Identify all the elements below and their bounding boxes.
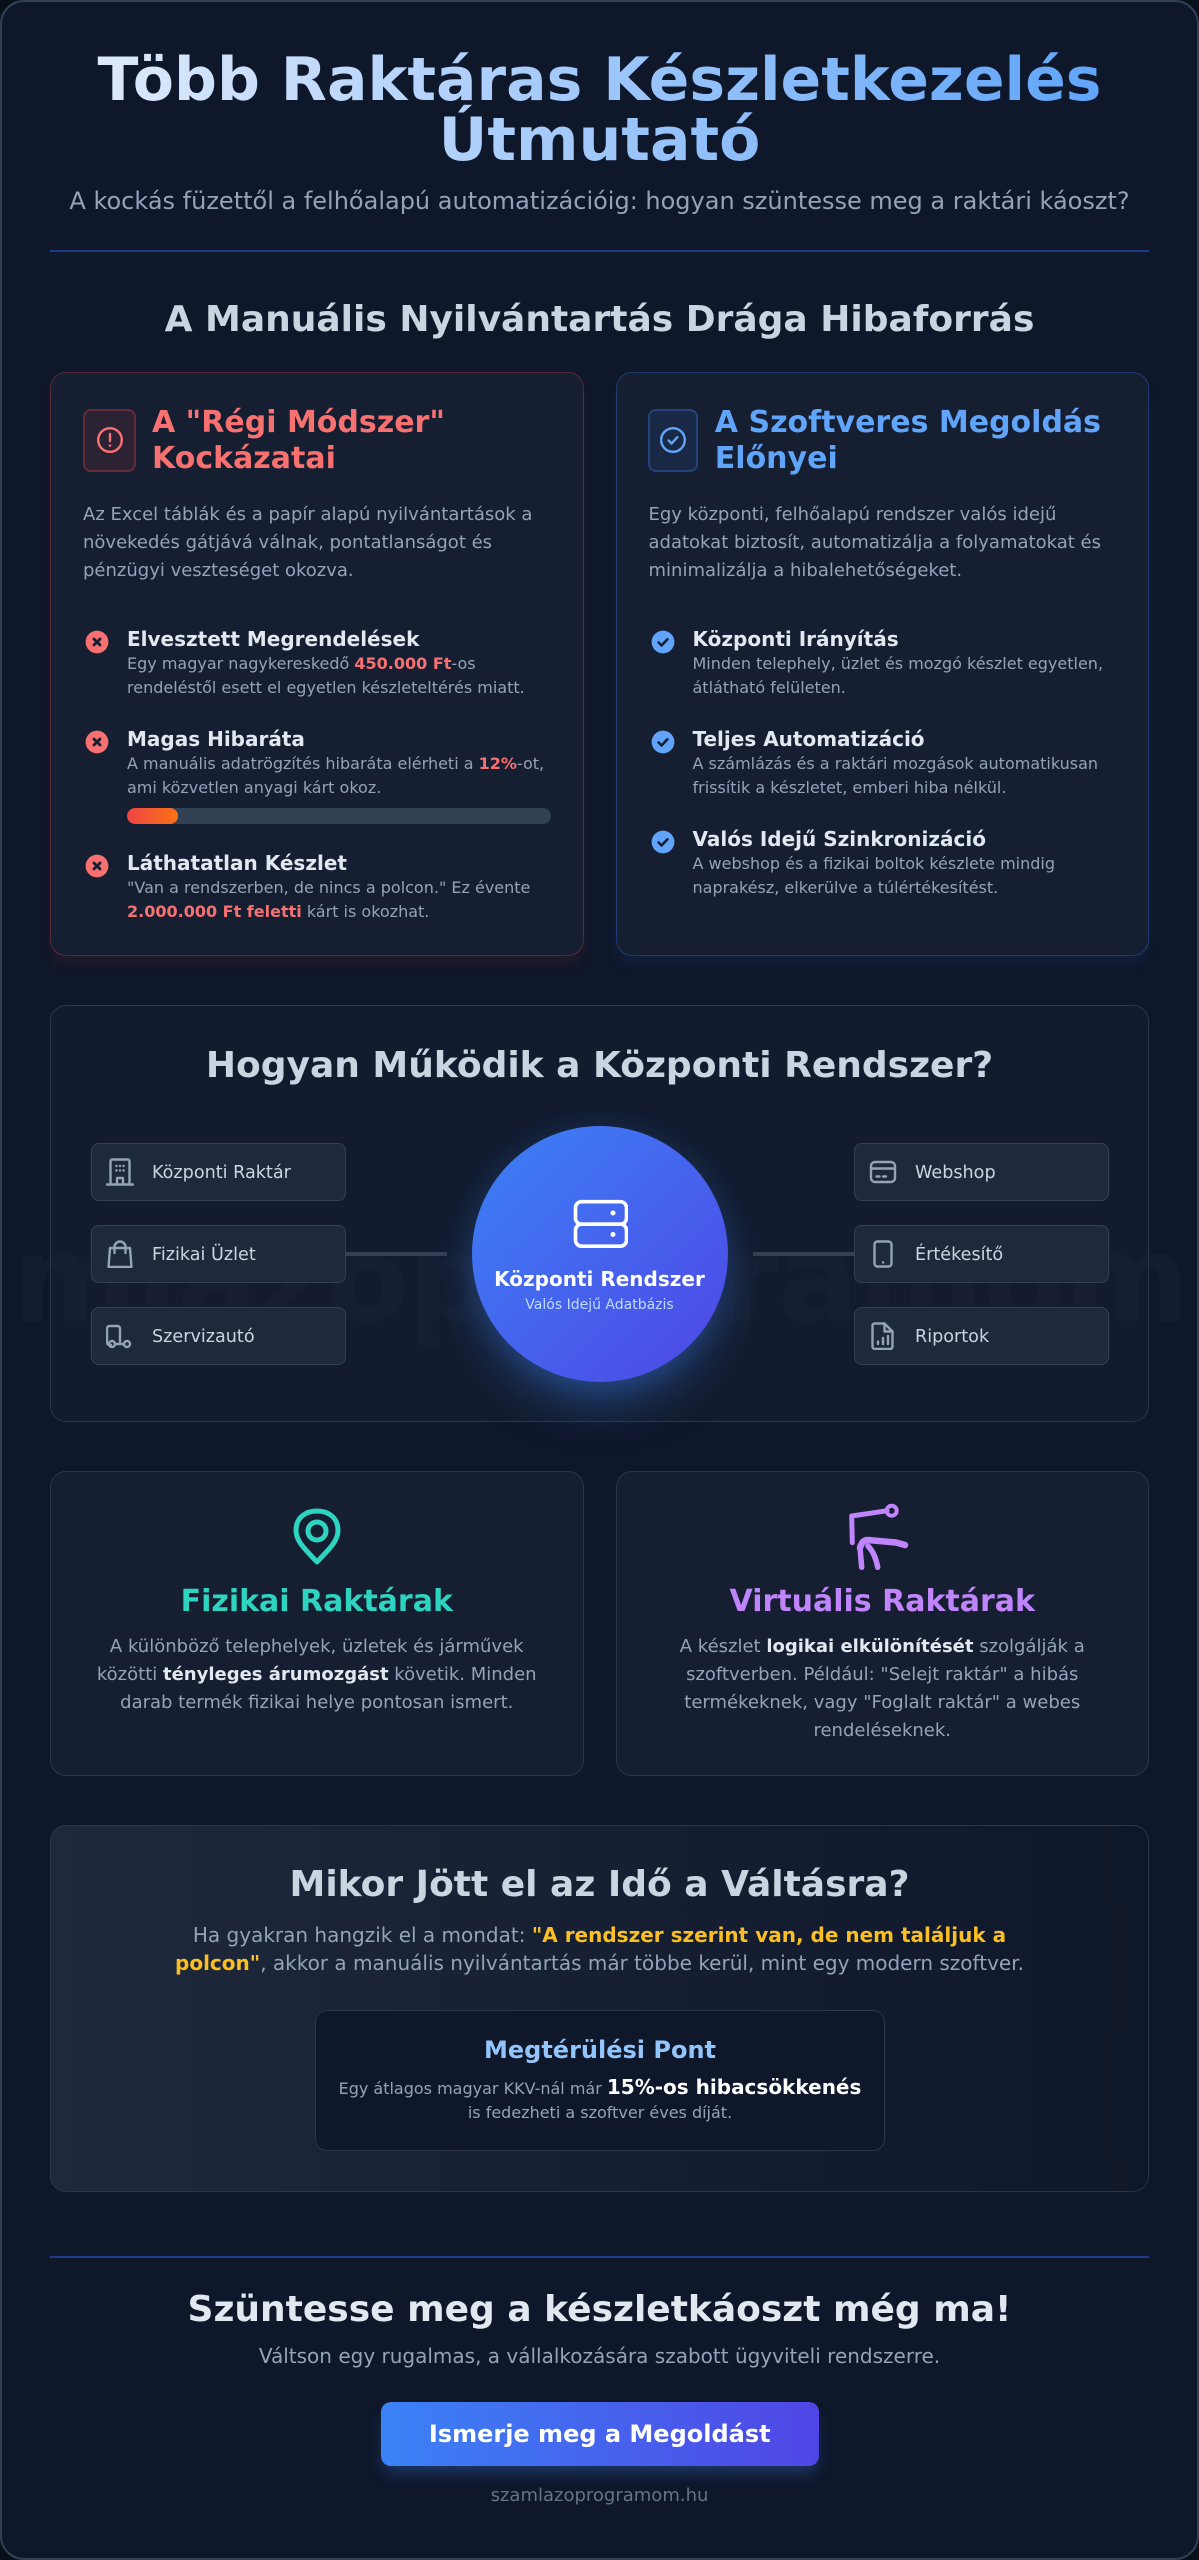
item: high error rate — [86, 727, 544, 797]
callout text — [339, 2075, 861, 2122]
item: realtime sync: naprakész, elkerülve a túlértékesítést. — [692, 878, 998, 897]
text — [175, 1923, 1024, 1974]
heading: A "Régi Módszer" — [152, 405, 445, 440]
intro text — [648, 504, 1101, 581]
intro text: pénzügyi veszteséget okozva. — [83, 560, 354, 581]
text: polcon", akkor a manuális nyilvántartás már többe kerül, mint egy modern szoftver. — [175, 1950, 1024, 1974]
callout heading: Megtérülési Pont — [484, 2036, 716, 2064]
icon: warning — [83, 408, 136, 472]
item: high error rate: ami közvetlen anyagi kárt okoz. — [127, 778, 381, 797]
heading: Virtuális Raktárak — [730, 1584, 1035, 1619]
chip: physical store: Fizikai Üzlet — [152, 1245, 256, 1265]
subtitle: A kockás füzettől a felhőalapú automatizációig: hogyan szüntesse meg a raktári káoszt? — [69, 187, 1130, 215]
text: közötti tényleges árumozgást követik. Minden — [97, 1664, 537, 1685]
callout text: Egy átlagos magyar KKV-nál már 15%-os hibacsökkenés — [339, 2075, 861, 2099]
item: lost orders: Elvesztett Megrendelések — [127, 627, 419, 651]
chip: sales rep: Értékesítő — [915, 1245, 1003, 1265]
chip: webshop — [854, 1143, 1109, 1201]
chip: sales rep — [854, 1225, 1109, 1283]
item: high error rate: A manuális adatrögzítés hibaráta elérheti a 12%-ot, — [127, 754, 544, 773]
watermark: mlazoprogramom — [12, 1210, 1189, 1350]
item: realtime sync: A webshop és a fizikai boltok készlete mindig — [692, 854, 1055, 873]
chip: physical store — [91, 1225, 346, 1283]
text — [97, 1636, 537, 1713]
item: realtime sync — [652, 827, 1055, 897]
intro text: növekedés gátjává válnak, pontatlanságot és — [83, 532, 492, 553]
central system hub — [472, 1126, 728, 1382]
item: central control: átlátható felületen. — [692, 678, 846, 697]
button: Ismerje meg a Megoldást — [429, 2420, 771, 2448]
item: full automation: Teljes Automatizáció — [692, 727, 925, 751]
progress bar: 12% — [127, 808, 550, 824]
heading: Mikor Jött el az Idő a Váltásra? — [290, 1864, 909, 1904]
item: realtime sync: Valós Idejű Szinkronizáció — [692, 827, 986, 851]
callout text: is fedezheti a szoftver éves díját. — [468, 2103, 732, 2122]
icon: map pin — [294, 1508, 340, 1564]
text: szoftverben. Például: "Selejt raktár" a hibás — [686, 1664, 1078, 1685]
chip: reports — [854, 1307, 1109, 1365]
item: central control — [652, 627, 1103, 697]
item: full automation: frissítik a készletet, emberi hiba nélkül. — [692, 778, 1006, 797]
call to action text: Váltson egy rugalmas, a vállalkozására szabott ügyviteli rendszerre. — [259, 2344, 940, 2368]
panel: when to switch — [50, 1825, 1149, 2192]
panel: software benefits — [616, 372, 1149, 956]
chip: central warehouse: Központi Raktár — [152, 1163, 291, 1183]
button — [380, 2402, 819, 2466]
heading: Hogyan Működik a Központi Rendszer? — [206, 1044, 993, 1086]
heading: Kockázatai — [152, 441, 336, 476]
hub label: Központi Rendszer — [494, 1267, 705, 1291]
text: rendeléseknek. — [813, 1720, 951, 1741]
item: full automation — [652, 727, 1098, 797]
icon: check badge — [648, 408, 698, 472]
callout: break-even — [315, 2010, 885, 2151]
title: Több Raktáras Készletkezelés — [97, 45, 1102, 115]
panel: old method risks — [50, 372, 584, 956]
text: A különböző telephelyek, üzletek és járművek — [110, 1636, 524, 1656]
heading — [714, 405, 1101, 476]
item: invisible stock: Láthatatlan Készlet — [127, 851, 347, 875]
text: Ha gyakran hangzik el a mondat: "A rendszer szerint van, de nem találjuk a — [193, 1923, 1006, 1947]
intro text: Egy központi, felhőalapú rendszer valós idejű — [648, 504, 1056, 524]
item: lost orders: rendeléstől esett el egyetlen készleteltérés miatt. — [127, 678, 525, 697]
title — [0, 50, 1199, 170]
chip: reports: Riportok — [915, 1327, 989, 1347]
icon: virtual — [849, 1504, 908, 1570]
item: invisible stock — [86, 851, 530, 921]
connector: left — [346, 1252, 447, 1256]
intro text: adatokat biztosít, automatizálja a folyamatokat és — [648, 532, 1101, 553]
heading — [152, 405, 445, 476]
heading: Előnyei — [715, 441, 838, 476]
item: invisible stock: 2.000.000 Ft feletti kárt is okozhat. — [127, 902, 429, 921]
item: high error rate: Magas Hibaráta — [127, 727, 305, 751]
heading: Fizikai Raktárak — [181, 1584, 453, 1619]
intro text: minimalizálja a hibalehetőségeket. — [648, 560, 962, 581]
source url: szamlazoprogramom.hu — [491, 2485, 708, 2506]
panel: virtual warehouses — [616, 1471, 1149, 1776]
text: termékeknek, vagy "Foglalt raktár" a webes — [684, 1692, 1080, 1713]
section heading: manual records: A Manuális Nyilvántartás Drága Hibaforrás — [165, 298, 1034, 340]
intro text — [83, 504, 532, 581]
chip: service van — [91, 1307, 346, 1365]
text: A készlet logikai elkülönítését szolgálják a — [680, 1636, 1085, 1656]
hub sublabel: Valós Idejű Adatbázis — [525, 1297, 674, 1313]
panel: physical warehouses — [50, 1471, 584, 1776]
chip: webshop: Webshop — [915, 1163, 996, 1183]
item: lost orders — [86, 627, 525, 697]
chip: central warehouse — [91, 1143, 346, 1201]
panel: central system diagram — [50, 1005, 1149, 1422]
intro text: Az Excel táblák és a papír alapú nyilvántartások a — [83, 504, 532, 524]
item: invisible stock: "Van a rendszerben, de nincs a polcon." Ez évente — [127, 878, 530, 897]
item: central control: Központi Irányítás — [692, 627, 899, 651]
connector: right — [753, 1252, 854, 1256]
heading: A Szoftveres Megoldás — [715, 405, 1101, 440]
item: central control: Minden telephely, üzlet és mozgó készlet egyetlen, — [692, 654, 1103, 673]
title: Útmutató — [439, 105, 760, 175]
chip: service van: Szervizautó — [152, 1327, 255, 1347]
text — [680, 1636, 1085, 1741]
item: full automation: A számlázás és a raktári mozgások automatikusan — [692, 754, 1098, 773]
call to action heading: Szüntesse meg a készletkáoszt még ma! — [188, 2288, 1011, 2330]
item: lost orders: Egy magyar nagykereskedő 450.000 Ft-os — [127, 654, 476, 673]
icon: server — [574, 1200, 628, 1248]
text: darab termék fizikai helye pontosan ismert. — [120, 1692, 513, 1713]
